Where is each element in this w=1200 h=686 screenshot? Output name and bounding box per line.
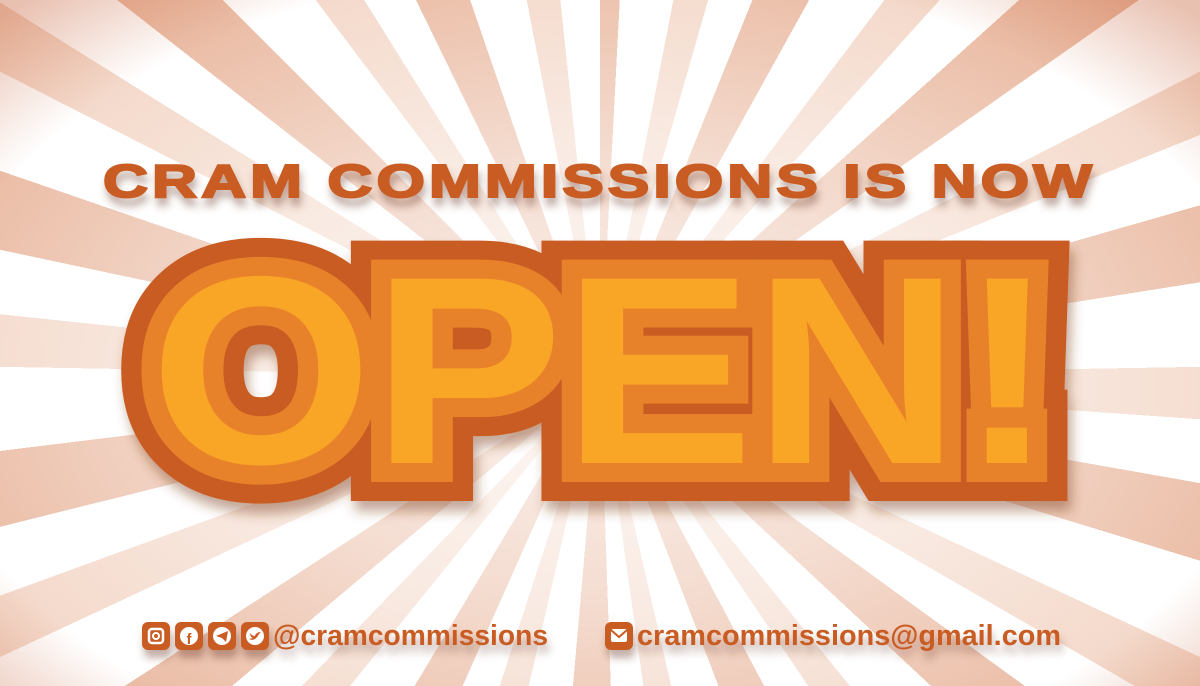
icon: telegram xyxy=(208,622,236,650)
social handles xyxy=(142,620,1061,652)
big word OPEN!: OPEN! xyxy=(150,220,1055,520)
icon: email xyxy=(605,622,633,650)
icon: instagram xyxy=(142,622,170,650)
big word OPEN!: OPEN! xyxy=(150,220,1055,520)
email text: cramcommissions@gmail.com xyxy=(637,620,1061,652)
icon: facebook: f xyxy=(186,631,192,648)
big word OPEN!: OPEN! xyxy=(150,220,1055,520)
handle text: @cramcommissions xyxy=(273,620,548,652)
icon: facebook xyxy=(175,622,203,650)
headline: CRAM COMMISSIONS IS NOW xyxy=(103,155,1096,207)
icon: twitter xyxy=(241,622,269,650)
